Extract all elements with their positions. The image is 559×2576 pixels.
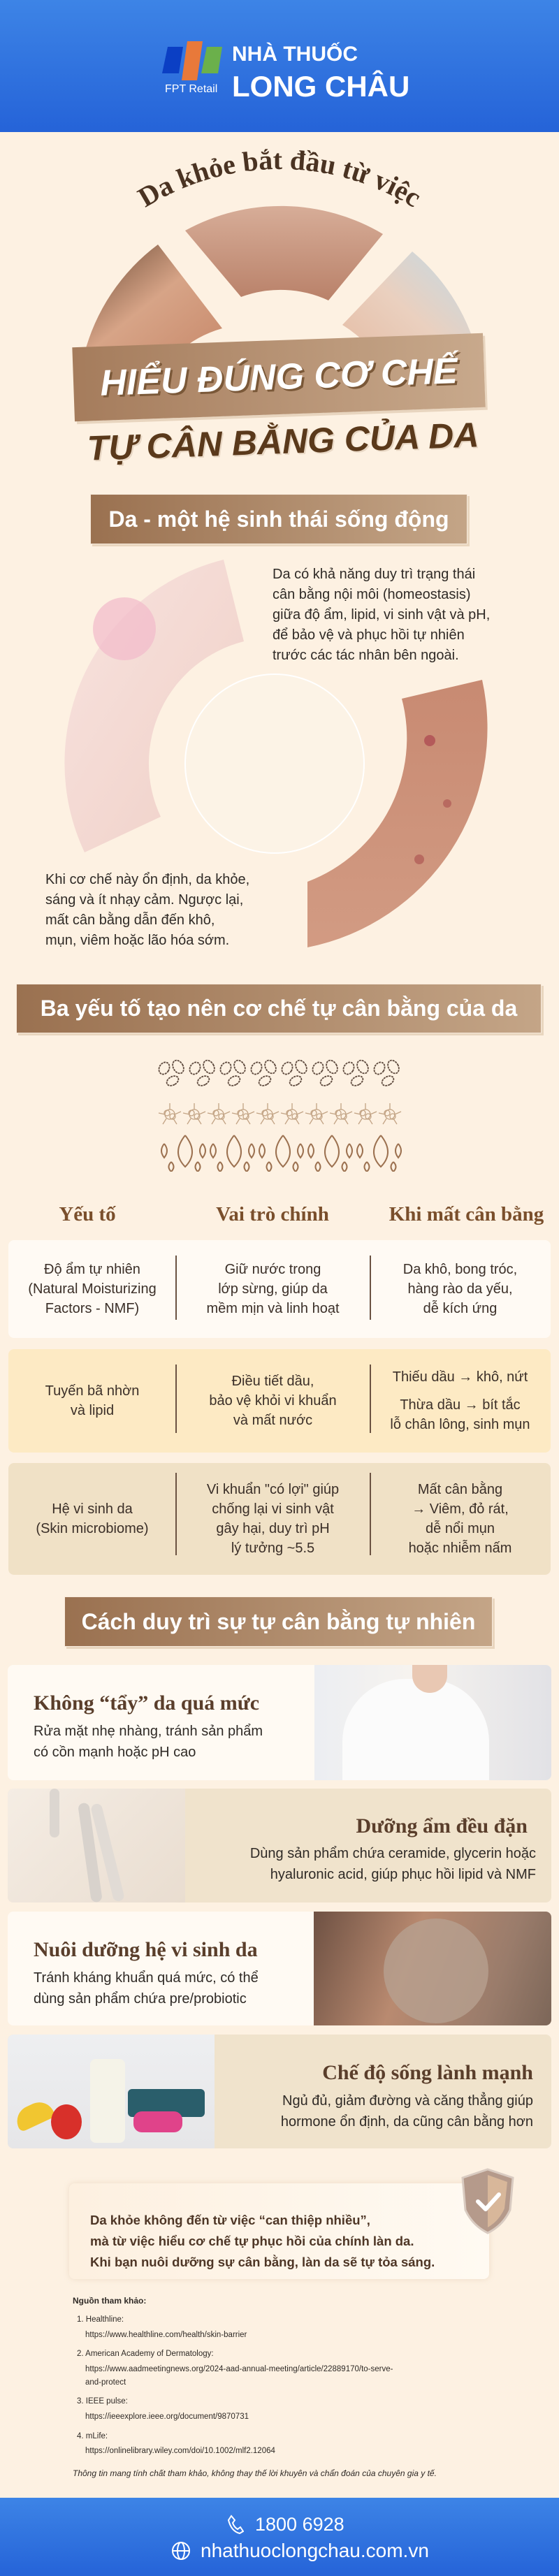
- icon: shield: [461, 2169, 514, 2234]
- banner: Hiểu đúng cơ chế: HIỂU ĐÚNG CƠ CHẾ: [99, 351, 458, 404]
- table row: NMF: mềm mịn và linh hoạt: [206, 1301, 340, 1316]
- center circle: [185, 674, 364, 853]
- references: and-protect: [85, 2378, 126, 2387]
- references: 4. mLife:: [77, 2432, 108, 2440]
- card: Nuôi dưỡng hệ vi sinh da: Nuôi dưỡng hệ vi sinh da: [34, 1938, 258, 1961]
- table row: sebum: lỗ chân lông, sinh mụn: [390, 1417, 530, 1432]
- table row: sebum: và mất nước: [233, 1413, 312, 1428]
- table row: microbiome: chống lại vi sinh vật: [212, 1501, 334, 1517]
- table row: NMF: dễ kích ứng: [423, 1301, 497, 1316]
- icon row: drops: [161, 1135, 401, 1172]
- title: Tự cân bằng của da: TỰ CÂN BẰNG CỦA DA: [87, 415, 479, 468]
- table row: microbiome: Hệ vi sinh da: [52, 1501, 133, 1517]
- card: Chế độ sống lành mạnh: [8, 2035, 551, 2148]
- icons: bacteria, molecules, drops: [158, 1059, 402, 1172]
- footer: [0, 2498, 559, 2576]
- image: facial mask: [314, 1912, 551, 2025]
- logo text: FPT Retail: FPT Retail: [165, 83, 217, 95]
- text: homeostasis description: để bảo vệ và phục hồi tự nhiên: [273, 627, 465, 643]
- banner: Hiểu đúng cơ chế: [72, 333, 486, 421]
- references: Nguồn tham khảo:: [73, 2296, 146, 2306]
- table row: NMF: [8, 1240, 551, 1338]
- table row: microbiome: gây hại, duy trì pH: [216, 1521, 330, 1536]
- card: Không tẩy da quá mức: Rửa mặt nhẹ nhàng, tránh sản phẩm: [34, 1724, 263, 1739]
- photo wedges: [84, 206, 482, 377]
- table row: sebum: và lipid: [71, 1403, 114, 1418]
- card: Chế độ sống lành mạnh: Ngủ đủ, giảm đường và căng thẳng giúp: [282, 2093, 533, 2109]
- ecosystem illustration: [64, 560, 488, 947]
- text: balance consequences: sáng và ít nhạy cảm. Ngược lại,: [45, 892, 243, 908]
- icon: FPT logo: [162, 41, 222, 80]
- card: Không tẩy da quá mức: có cồn mạnh hoặc pH cao: [34, 1745, 196, 1760]
- card: Chế độ sống lành mạnh: Chế độ sống lành mạnh: [322, 2061, 533, 2084]
- table row: NMF: (Natural Moisturizing: [28, 1281, 157, 1297]
- table row: NMF: Factors - NMF): [45, 1301, 139, 1316]
- table row: microbiome: (Skin microbiome): [36, 1521, 149, 1536]
- logo text: Nhà thuốc Long Châu: NHÀ THUỐC: [232, 43, 358, 66]
- text: homeostasis description: cân bằng nội môi (homeostasis): [273, 587, 470, 602]
- table row: NMF: Giữ nước trong: [225, 1262, 321, 1277]
- hero: [72, 149, 488, 468]
- table header: Khi mất cân bằng: [389, 1203, 544, 1225]
- text: balance consequences: [45, 872, 249, 948]
- table row: NMF: Da khô, bong tróc,: [403, 1262, 517, 1277]
- table row: microbiome: Vi khuẩn "có lợi" giúp: [207, 1482, 339, 1497]
- table row: sebum: Thừa dầu → bít tắc: [400, 1397, 521, 1413]
- icon row: bacteria: [157, 1058, 401, 1088]
- text: homeostasis description: trước các tác nhân bên ngoài.: [273, 648, 459, 663]
- card: Nuôi dưỡng hệ vi sinh da: [8, 1912, 551, 2025]
- logo: [162, 41, 409, 103]
- table row: NMF: hàng rào da yếu,: [407, 1281, 513, 1297]
- table header: Yếu tố: [59, 1203, 116, 1225]
- text: balance consequences: mụn, viêm hoặc lão hóa sớm.: [45, 933, 229, 948]
- image: fruit, shaker, dumbbells: [8, 2035, 215, 2148]
- arc title: Da khỏe bắt đầu từ việc: [136, 149, 419, 208]
- table row: sebum: bảo vệ khỏi vi khuẩn: [209, 1393, 337, 1409]
- references: 1. Healthline:: [77, 2315, 124, 2324]
- table header: Vai trò chính: [216, 1203, 329, 1225]
- card: Không tẩy da quá mức: Không “tẩy” da quá mức: [34, 1691, 259, 1715]
- image: skin cell arc: [64, 560, 244, 852]
- section banner: Cách duy trì: Cách duy trì sự tự cân bằng tự nhiên: [82, 1608, 475, 1633]
- table row: NMF: lớp sừng, giúp da: [218, 1281, 328, 1297]
- callout: closing quote: Khi bạn nuôi dưỡng sự cân bằng, làn da sẽ tự tỏa sáng.: [90, 2255, 435, 2269]
- table row: NMF: Độ ẩm tự nhiên: [44, 1262, 140, 1277]
- table row: microbiome: lý tưởng ~5.5: [231, 1541, 314, 1556]
- callout: closing quote: Da khỏe không đến từ việc “can thiệp nhiều”,: [90, 2213, 370, 2227]
- card: Chế độ sống lành mạnh: hormone ổn định, da cũng cân bằng hơn: [281, 2114, 533, 2130]
- section banner: Da - một hệ sinh thái sống động: [90, 494, 467, 544]
- table header: [59, 1203, 544, 1225]
- references: https://www.aadmeetingnews.org/2024-aad-annual-meeting/article/22889170/to-serve-: [85, 2365, 393, 2373]
- contact: website: nhathuoclongchau.com.vn: [201, 2540, 429, 2561]
- text: homeostasis description: [273, 567, 490, 663]
- table row: microbiome: Mất cân bằng: [418, 1482, 502, 1497]
- references: https://onlinelibrary.wiley.com/doi/10.1002/mlf2.12064: [85, 2447, 275, 2455]
- card: Dưỡng ẩm đều đặn: Dưỡng ẩm đều đặn: [356, 1814, 528, 1838]
- logo text: Nhà thuốc Long Châu: LONG CHÂU: [232, 70, 409, 103]
- table row: microbiome: hoặc nhiễm nấm: [409, 1541, 511, 1556]
- card: Dưỡng ẩm đều đặn: [8, 1789, 551, 1902]
- icon row: molecules: [159, 1103, 401, 1124]
- callout: closing quote: mà từ việc hiểu cơ chế tự phục hồi của chính làn da.: [90, 2234, 414, 2248]
- card: Nuôi dưỡng hệ vi sinh da: Tránh kháng khuẩn quá mức, có thể: [34, 1970, 259, 1986]
- image: acne skin arc: [307, 680, 488, 947]
- callout: closing quote: [69, 2183, 489, 2279]
- contact: phone: 1800 6928: [255, 2514, 344, 2535]
- section banner: Ba yếu tố: [16, 984, 542, 1033]
- logo text: Nhà thuốc Long Châu: [232, 42, 409, 103]
- card: Nuôi dưỡng hệ vi sinh da: dùng sản phẩm chứa pre/probiotic: [34, 1991, 247, 2007]
- table row: sebum: Tuyến bã nhờn: [45, 1383, 139, 1399]
- card: Dưỡng ẩm đều đặn: Dùng sản phẩm chứa ceramide, glycerin hoặc: [250, 1846, 536, 1861]
- card: Dưỡng ẩm đều đặn: hyaluronic acid, giúp phục hồi lipid và NMF: [270, 1867, 536, 1882]
- image: serum droppers: [8, 1789, 185, 1902]
- text: balance consequences: Khi cơ chế này ổn định, da khỏe,: [45, 872, 249, 887]
- table row: microbiome: → Viêm, đỏ rát,: [412, 1501, 509, 1517]
- section banner: Cách duy trì: [64, 1596, 493, 1647]
- text: balance consequences: mất cân bằng dẫn đến khô,: [45, 912, 215, 928]
- references: 3. IEEE pulse:: [77, 2397, 128, 2406]
- section banner: Da - một hệ sinh thái sống động: Da - một hệ sinh thái sống động: [108, 506, 449, 531]
- references: Thông tin mang tính chất tham khảo, không thay thế lời khuyên và chẩn đoán của chuyên gia y tế.: [73, 2468, 437, 2478]
- table row: sebum: Điều tiết dầu,: [232, 1374, 314, 1389]
- references: [73, 2296, 437, 2478]
- card: Không tẩy da quá mức: [8, 1665, 551, 1780]
- table row: microbiome: [8, 1463, 551, 1575]
- image: woman with toner: [314, 1665, 551, 1780]
- references: https://www.healthline.com/health/skin-barrier: [85, 2331, 247, 2339]
- table row: sebum: Thiếu dầu → khô, nứt: [393, 1369, 528, 1385]
- table row: sebum: [8, 1349, 551, 1453]
- references: https://ieeexplore.ieee.org/document/9870731: [85, 2413, 249, 2421]
- table row: microbiome: dễ nổi mụn: [426, 1521, 495, 1536]
- text: homeostasis description: Da có khả năng duy trì trạng thái: [273, 567, 475, 582]
- header: [0, 0, 559, 132]
- references: 2. American Academy of Dermatology:: [77, 2350, 214, 2358]
- section banner: Ba yếu tố: Ba yếu tố tạo nên cơ chế tự cân bằng của da: [41, 996, 517, 1021]
- text: homeostasis description: giữa độ ẩm, lipid, vi sinh vật và pH,: [273, 607, 490, 623]
